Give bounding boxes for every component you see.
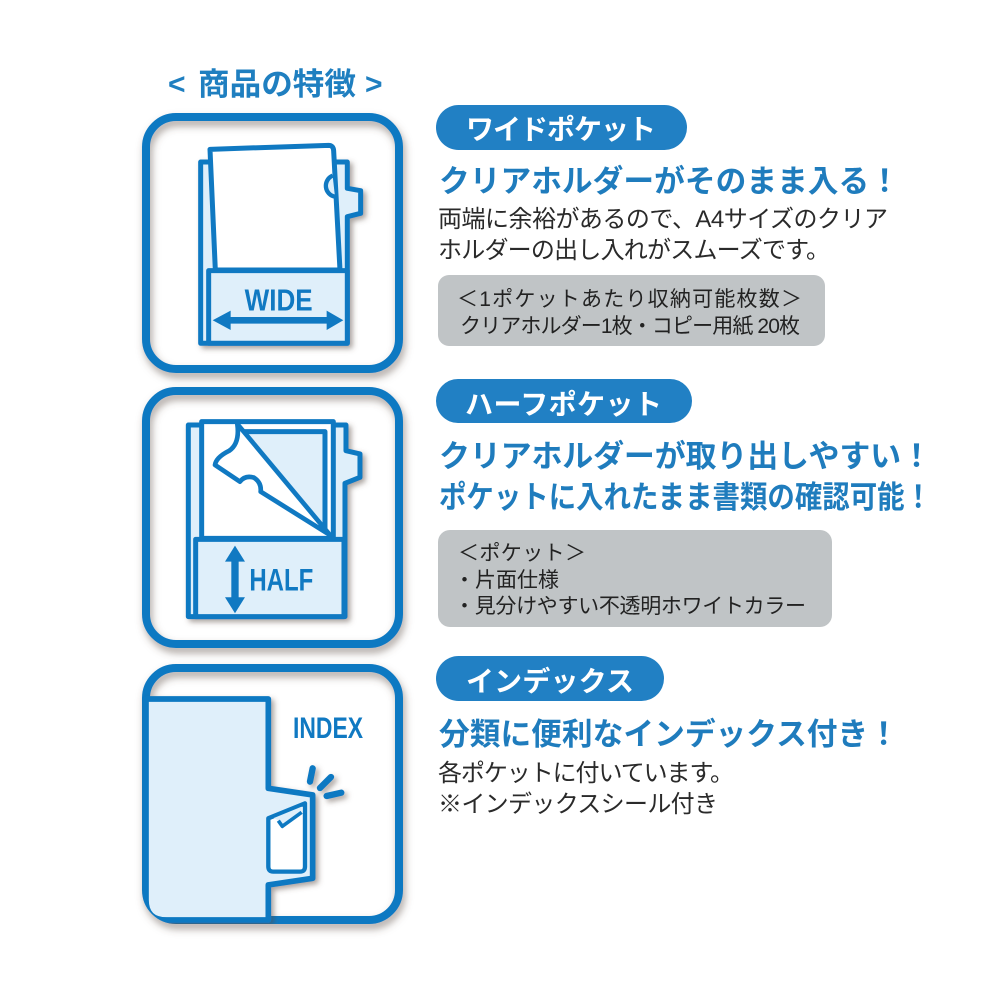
note box: クリアホルダー1枚・コピー用紙 20枚 xyxy=(460,315,800,338)
heading lines: ポケットに入れたまま書類の確認可能！ xyxy=(439,480,932,515)
icon: half pocket folder xyxy=(188,422,360,617)
panel: index icon xyxy=(146,668,399,920)
badge: index xyxy=(436,656,664,701)
icon label: INDEX: INDEX xyxy=(293,712,363,745)
icon: index tab xyxy=(146,699,341,920)
body text: ホルダーの出し入れがスムーズです。 xyxy=(438,237,830,264)
heading lines: クリアホルダーが取り出しやすい！ xyxy=(439,439,932,474)
icon: wide pocket folder: WIDE xyxy=(245,284,313,318)
note box: ・見分けやすい不透明ホワイトカラー xyxy=(454,595,806,618)
note box: ・片面仕様 xyxy=(454,569,559,592)
title: < xyxy=(168,68,186,101)
badge: wide pocket xyxy=(436,105,687,150)
panel: wide pocket icon xyxy=(146,117,399,369)
icon frame xyxy=(146,391,399,644)
body text: 両端に余裕があるので、A4サイズのクリア xyxy=(438,206,888,233)
section: wide pocket xyxy=(436,105,900,346)
heading: 分類に便利なインデックス付き！ xyxy=(439,717,899,752)
title: 商品の特徴 xyxy=(198,67,356,102)
section: half pocket xyxy=(436,379,932,627)
icon frame xyxy=(146,668,399,920)
icon: half pocket folder: HALF xyxy=(249,562,313,598)
heading lines xyxy=(439,439,932,515)
panel: half pocket icon xyxy=(146,391,399,644)
body text xyxy=(438,206,888,264)
body text xyxy=(438,760,734,818)
body text: 各ポケットに付いています。 xyxy=(438,760,734,787)
title: > xyxy=(365,68,383,101)
body text: ※インデックスシール付き xyxy=(438,791,718,818)
heading: クリアホルダーがそのまま入る！ xyxy=(439,164,900,199)
note box xyxy=(438,275,825,346)
note box: ＜ポケット＞ xyxy=(458,542,586,565)
icon frame xyxy=(146,117,399,369)
badge: wide pocket: ワイドポケット xyxy=(466,114,656,145)
note box xyxy=(438,530,832,627)
badge: index: インデックス xyxy=(466,665,634,697)
badge: half pocket xyxy=(436,379,692,423)
note box: ＜1ポケットあたり収納可能枚数＞ xyxy=(457,288,802,311)
icon: wide pocket folder xyxy=(201,145,361,343)
section: index xyxy=(436,656,899,818)
badge: half pocket: ハーフポケット xyxy=(465,389,662,420)
